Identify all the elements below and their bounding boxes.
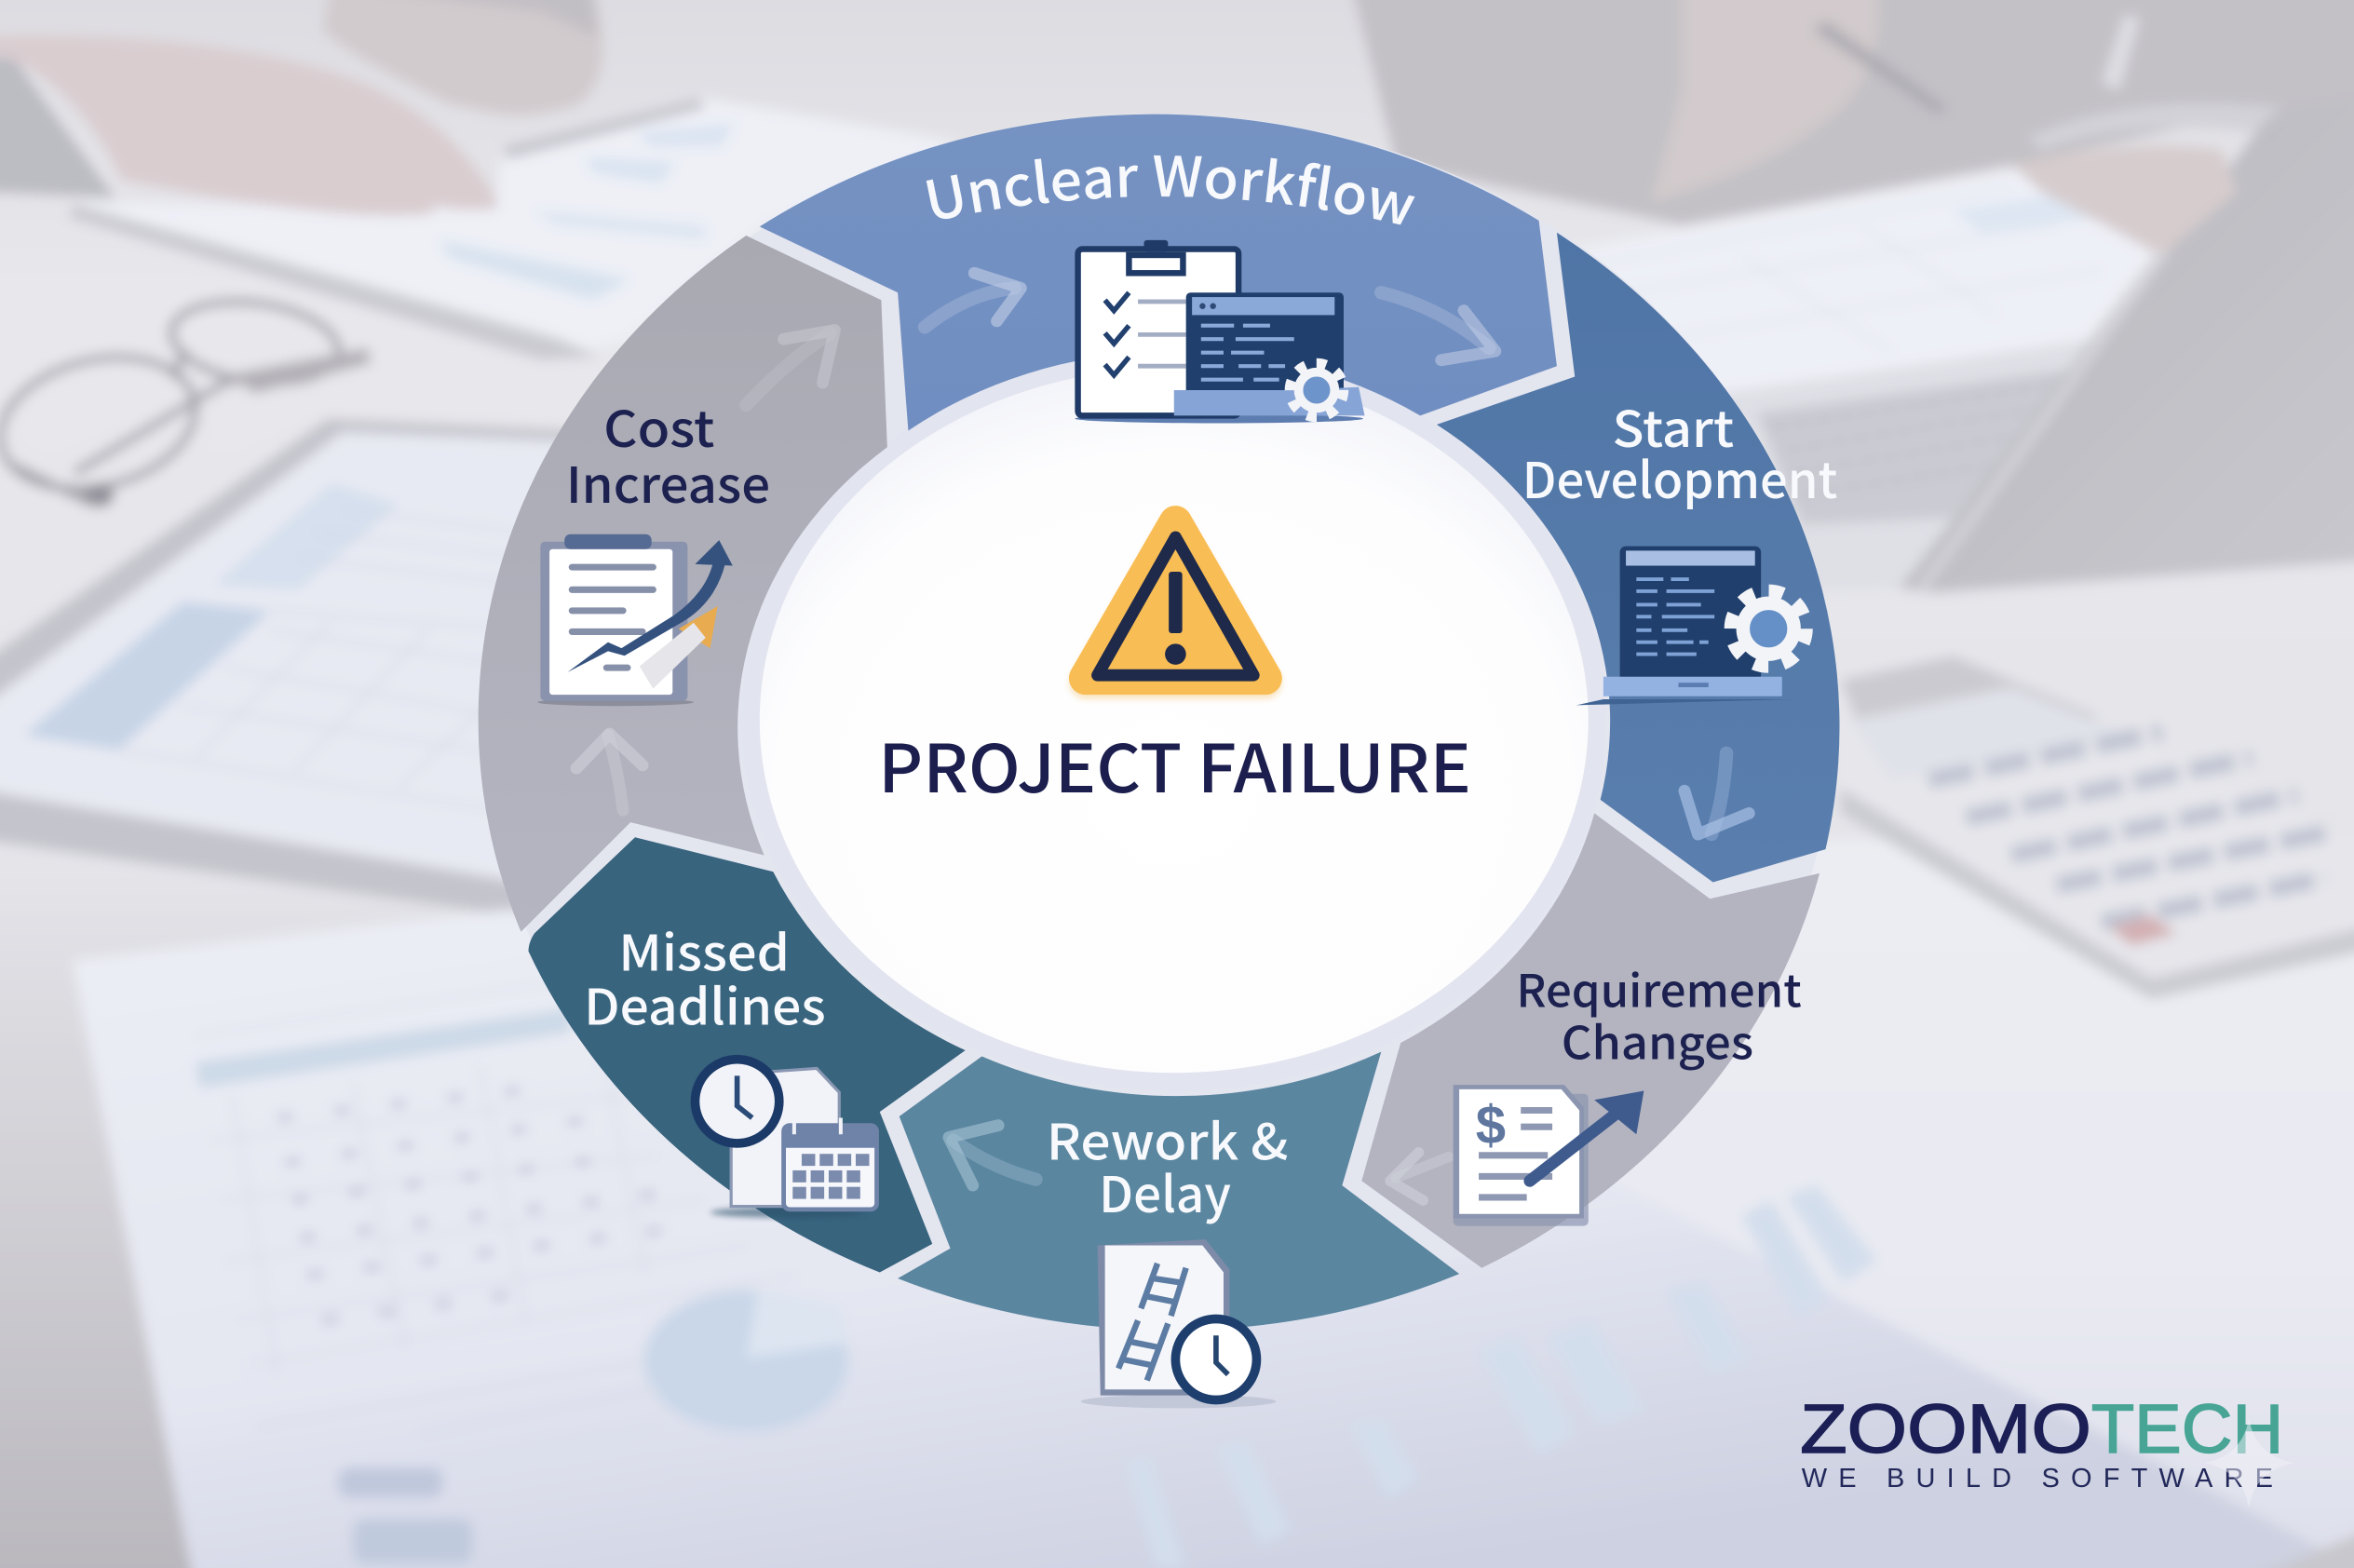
inner white circle <box>760 368 1589 1073</box>
right document on laptop <box>1501 169 2151 420</box>
segment: Cost Increase <box>479 236 887 932</box>
lower paper <box>72 910 2354 1568</box>
lower right bars <box>1126 1185 1876 1568</box>
sparkle <box>2204 1418 2294 1508</box>
label: Requirement Changes: Requirement <box>1516 954 1802 1020</box>
label: Requirement Changes <box>1516 954 1802 1073</box>
arrow: to Requirement Changes <box>1684 753 1749 834</box>
paper smudges <box>338 1467 443 1497</box>
icon: warning triangle <box>1086 522 1265 683</box>
upper document <box>75 99 961 360</box>
label: Rework and Delay <box>1047 1103 1288 1227</box>
label: Start Development: Development <box>1522 441 1837 513</box>
left laptop <box>0 57 117 198</box>
glasses <box>0 291 368 508</box>
right laptop base <box>1636 339 2091 593</box>
calculator <box>1841 656 2354 992</box>
segment: Start Development <box>1437 233 1839 883</box>
logo: Zoomotech: WE BUILD SOFTWARE <box>1802 1464 2273 1494</box>
segment: Unclear Workflow <box>760 115 1557 430</box>
arrow: into Unclear Workflow <box>925 273 1021 327</box>
title: Project Failure: PROJECT FAILURE <box>878 717 1471 812</box>
heading: Unclear Workflow <box>926 155 1415 225</box>
top right sleeve area <box>1351 0 2354 225</box>
inner border <box>741 349 1606 1091</box>
label: Missed Deadlines: Deadlines <box>584 968 826 1040</box>
logo: Zoomotech: ZOOMO <box>1800 1390 2091 1467</box>
arrow: to Start Development <box>1381 292 1495 360</box>
dollar sign: $ <box>1476 1095 1506 1156</box>
segment: Requirement Changes <box>1361 813 1820 1268</box>
arrow: to Cost Increase <box>576 734 643 810</box>
logo: Zoomotech <box>1800 1390 2294 1508</box>
icon: clipboard and code window <box>1075 240 1365 423</box>
icon: report with rising cost <box>537 534 733 706</box>
segment: Rework and Delay <box>898 1052 1459 1331</box>
pie chart <box>644 1291 848 1431</box>
arrow: to Missed Deadlines <box>949 1126 1035 1185</box>
icon: laptop with code and gear <box>1576 547 1805 705</box>
lower table <box>196 1008 571 1088</box>
right laptop lid <box>1899 90 2354 593</box>
lower right desk <box>1051 840 2354 1568</box>
label: Cost Increase <box>566 390 770 518</box>
label: Cost Increase: Increase <box>566 446 770 518</box>
clipboard <box>0 419 751 930</box>
flow arrows <box>576 273 1749 1200</box>
label: Missed Deadlines: Missed <box>618 914 790 986</box>
segment: Missed Deadlines <box>529 837 966 1273</box>
label: Rework and Delay: Rework & <box>1047 1103 1288 1175</box>
cycle ring <box>479 114 1839 1331</box>
label: Rework and Delay: Delay <box>1099 1156 1231 1227</box>
icon: budget document with arrow <box>1454 1085 1644 1226</box>
right hands <box>1651 0 1879 203</box>
arrow: to Unclear Workflow from Cost <box>746 331 834 405</box>
icon: clock, document and calendar <box>695 1060 877 1218</box>
heading: Unclear Workflow: Unclear Workflow <box>926 155 1415 225</box>
label: Start Development: Start <box>1613 390 1734 462</box>
left hand <box>0 35 498 216</box>
arrow: to Rework <box>1390 1153 1449 1200</box>
ring backing <box>483 114 1834 1320</box>
label: Missed Deadlines <box>584 914 826 1040</box>
label: Requirement Changes: Changes <box>1562 1007 1753 1073</box>
icon: broken ladder and clock <box>1081 1239 1276 1408</box>
label: Cost Increase: Cost <box>603 390 714 462</box>
logo: Zoomotech: TECH <box>2091 1390 2283 1467</box>
label: Start Development <box>1522 390 1837 513</box>
